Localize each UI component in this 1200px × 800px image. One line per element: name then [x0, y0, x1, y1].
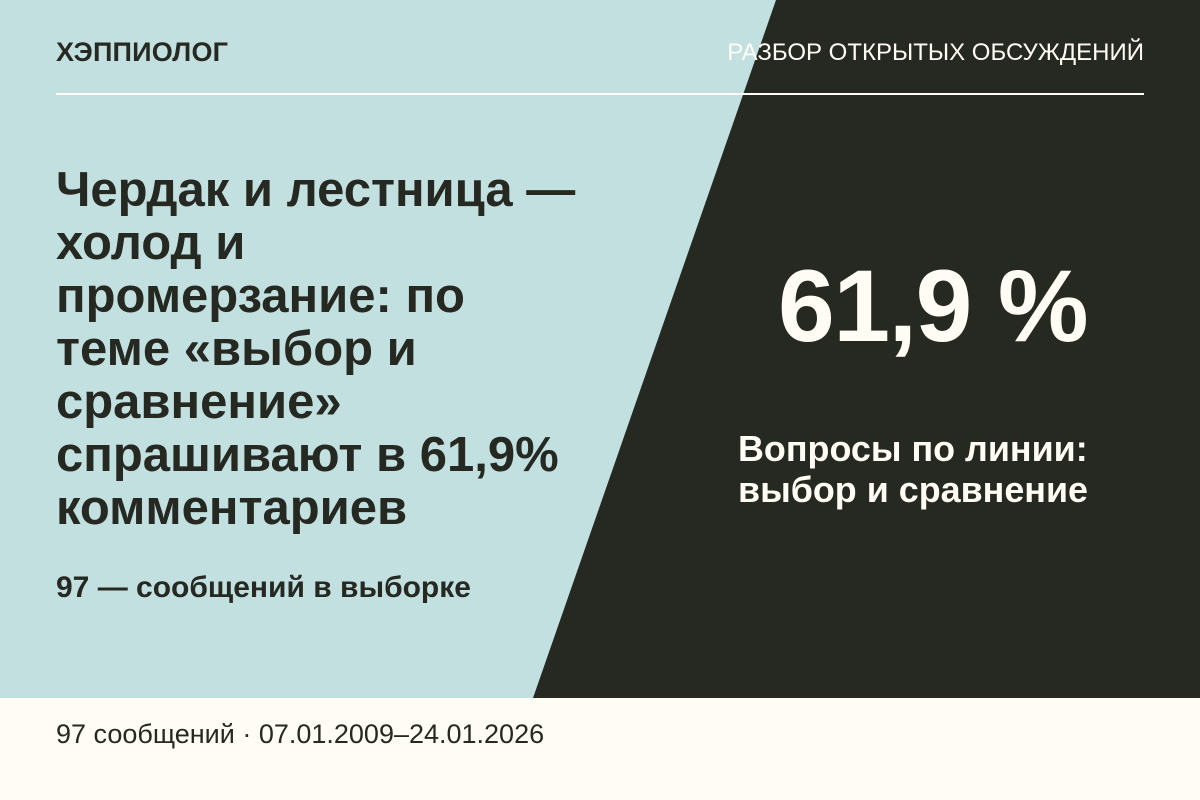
sample size note: 97 — сообщений в выборке: [56, 571, 471, 604]
header rule: [56, 93, 1144, 95]
key figure label: [738, 429, 1088, 510]
header caption: РАЗБОР ОТКРЫТЫХ ОБСУЖДЕНИЙ: [727, 39, 1144, 66]
key figure label: выбор и сравнение: [738, 470, 1088, 510]
main heading: комментариев: [56, 481, 407, 535]
footer text: 97 сообщений · 07.01.2009–24.01.2026: [56, 719, 544, 749]
brand name: ХЭППИОЛОГ: [56, 37, 228, 67]
main heading: сравнение»: [56, 375, 342, 429]
footer band: [0, 698, 1200, 800]
key figure: 61,9 %: [778, 249, 1087, 363]
main heading: [56, 163, 576, 535]
main heading: Чердак и лестница —: [56, 163, 575, 217]
key figure label: Вопросы по линии:: [738, 429, 1088, 469]
main heading: промерзание: по: [56, 269, 465, 323]
main heading: спрашивают в 61,9%: [56, 428, 559, 482]
main heading: холод и: [56, 216, 245, 270]
main heading: теме «выбор и: [56, 322, 417, 376]
